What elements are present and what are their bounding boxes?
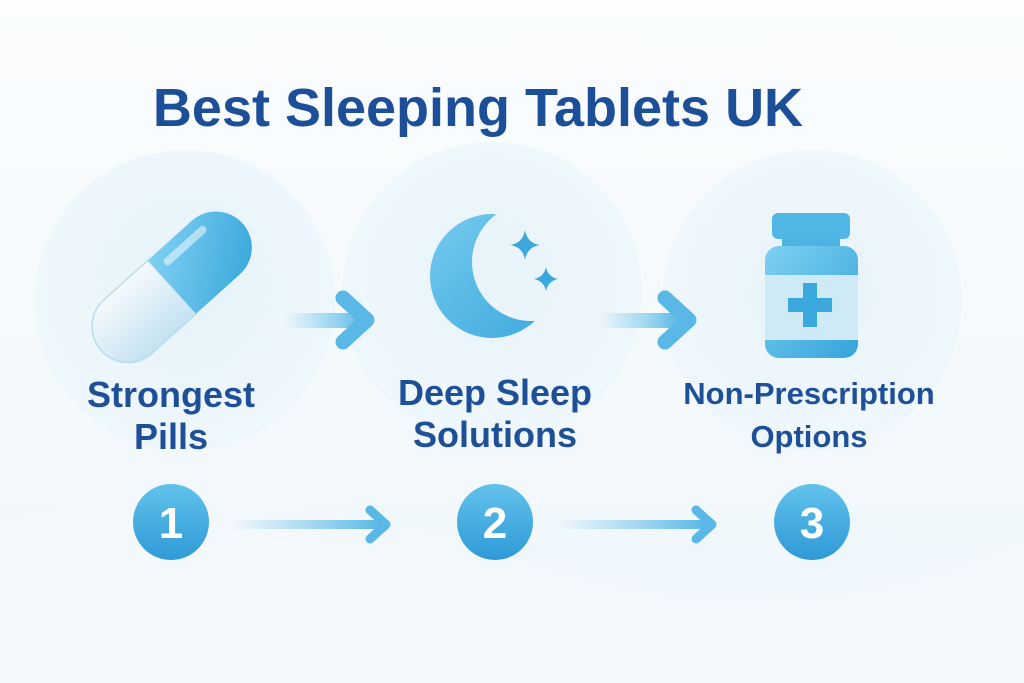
label 1: Strongest [87, 374, 255, 415]
panel circles [35, 142, 962, 450]
number 1: 1 [159, 499, 183, 548]
label 2: Solutions [413, 414, 577, 455]
label 3: Non-Prescription [683, 376, 935, 411]
label 3 [683, 376, 935, 454]
arrow 1 [285, 298, 367, 342]
number 2: 2 [483, 499, 507, 548]
number 2 [457, 484, 533, 560]
bottom arrow 1 [230, 510, 386, 539]
arrow 2 [600, 298, 689, 342]
number 1 [133, 484, 209, 560]
icon: bottle [765, 213, 858, 358]
title: Best Sleeping Tablets UK [153, 78, 803, 138]
icon: pill [77, 197, 267, 377]
icon: moon [430, 214, 558, 338]
label 3: Options [750, 419, 868, 454]
number 3 [774, 484, 850, 560]
label 1 [87, 374, 255, 457]
bottom arrow 2 [555, 510, 712, 539]
label 2 [398, 372, 592, 455]
label 1: Pills [134, 416, 208, 457]
number 3: 3 [800, 499, 824, 548]
label 2: Deep Sleep [398, 372, 592, 413]
